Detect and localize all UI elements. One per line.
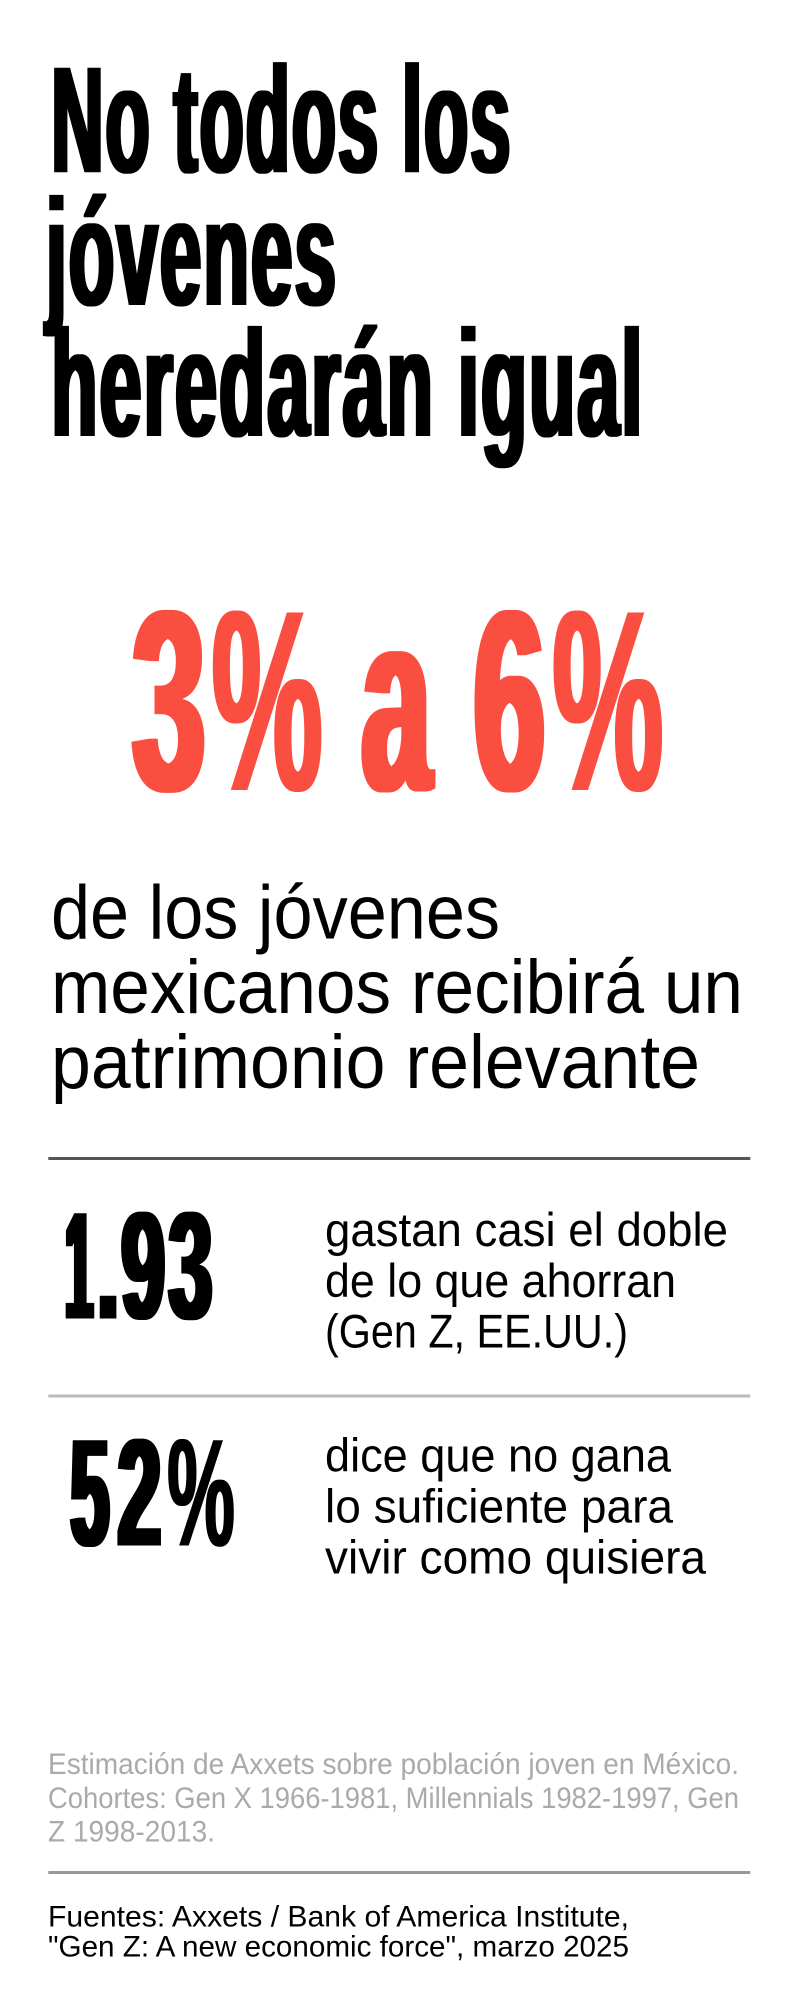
description: dice que no gana: vivir como quisiera xyxy=(325,1530,707,1584)
big statistic: 3% a 6%: a xyxy=(362,556,431,845)
methodology note: Z 1998-2013. xyxy=(48,1815,215,1848)
number: 52% xyxy=(71,1408,235,1578)
title: jóvenes xyxy=(45,168,338,338)
description: dice que no gana xyxy=(325,1429,707,1584)
subheading: patrimonio relevante xyxy=(51,1020,700,1105)
big statistic: 3% a 6%: 6 xyxy=(474,556,545,845)
subheading xyxy=(51,870,743,1105)
number: 52%: 2 xyxy=(118,1408,161,1578)
description: gastan casi el doble: (Gen Z, EE.UU.) xyxy=(325,1304,628,1358)
statistic row: 52% xyxy=(71,1408,707,1584)
big statistic: 3% a 6% xyxy=(132,556,663,845)
big statistic: 3% a 6%: % xyxy=(212,556,323,845)
number: 1.93: 3 xyxy=(169,1180,212,1352)
big statistic: 3% a 6%: 3 xyxy=(132,556,205,845)
title xyxy=(45,35,644,469)
number: 1.93: . xyxy=(98,1180,119,1352)
subheading: de los jóvenes xyxy=(51,870,500,956)
description: dice que no gana: dice que no gana xyxy=(325,1429,672,1482)
text: % xyxy=(552,556,663,845)
description: dice que no gana: lo suficiente para xyxy=(325,1480,674,1533)
number: 1.93: 9 xyxy=(121,1180,165,1352)
number: 52%: 5 xyxy=(71,1408,109,1578)
statistic row: 52%: % xyxy=(167,1408,235,1578)
description: gastan casi el doble: gastan casi el doble xyxy=(325,1203,728,1256)
subheading: mexicanos recibirá un xyxy=(51,945,743,1030)
methodology note: Estimación de Axxets sobre población joven en México. xyxy=(48,1748,739,1781)
sources: "Gen Z: A new economic force", marzo 2025 xyxy=(48,1930,629,1964)
statistic row: 1.93 xyxy=(66,1180,728,1358)
sources xyxy=(48,1900,629,1964)
number: 1.93 xyxy=(66,1180,212,1352)
methodology note xyxy=(48,1748,739,1848)
sources: Fuentes: Axxets / Bank of America Institute, xyxy=(48,1900,629,1934)
number: 1.93: 1 xyxy=(66,1180,93,1352)
description: gastan casi el doble xyxy=(325,1203,728,1358)
methodology note: Cohortes: Gen X 1966-1981, Millennials 1982-1997, Gen xyxy=(48,1782,739,1815)
description: gastan casi el doble: de lo que ahorran xyxy=(325,1254,676,1307)
